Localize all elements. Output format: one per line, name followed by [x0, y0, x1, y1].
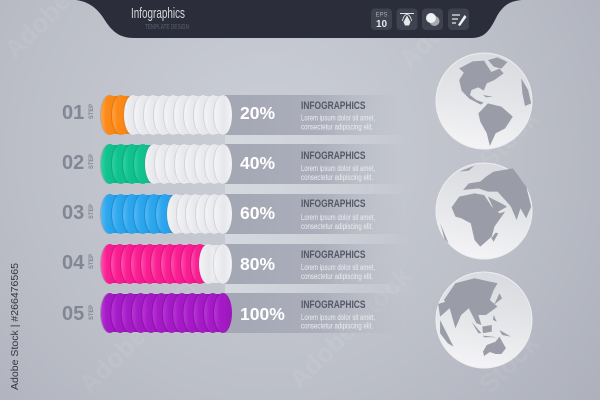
- header title: Infographics: [131, 5, 185, 22]
- light strips between rows: [225, 135, 420, 293]
- step label: STEP: [89, 104, 95, 119]
- text block: INFOGRAPHICS: [301, 198, 366, 210]
- watermark: Adobe Stock: [73, 265, 207, 399]
- icon: pen tool: [396, 8, 418, 30]
- step number: 05: [62, 303, 84, 325]
- header bar: [76, 0, 522, 38]
- disc cylinder 60%: [100, 194, 232, 234]
- percent: 40%: [240, 153, 275, 173]
- step label: STEP: [89, 254, 95, 269]
- watermark: Adobe Stock: [208, 110, 342, 244]
- text block: consectetur adipiscing elit.: [301, 173, 373, 182]
- step label: STEP: [89, 154, 95, 169]
- text block: [301, 150, 375, 182]
- band: [222, 95, 402, 135]
- disc cylinder 20%: [100, 95, 232, 135]
- text block: [301, 249, 375, 281]
- text block: Lorem ipsum dolor sit amet,: [301, 213, 375, 222]
- step number: 04: [62, 252, 85, 274]
- text block: consectetur adipiscing elit.: [301, 322, 373, 330]
- text block: consectetur adipiscing elit.: [301, 122, 373, 132]
- globe: Asia and Australia: [436, 272, 532, 368]
- text block: INFOGRAPHICS: [301, 150, 366, 162]
- step 05 row: [62, 293, 402, 333]
- icon: overlapping circles: [422, 8, 443, 30]
- text block: [301, 198, 375, 231]
- icon: EPS 10: [371, 8, 392, 30]
- band: [222, 293, 402, 333]
- watermark: Adobe Stock: [283, 260, 417, 394]
- text block: Lorem ipsum dolor sit amet,: [301, 114, 375, 122]
- band: [222, 144, 402, 184]
- header subtitle: TEMPLATE DESIGN: [145, 24, 189, 31]
- text block: INFOGRAPHICS: [301, 100, 366, 112]
- text block: [301, 100, 375, 132]
- band: [222, 194, 402, 234]
- percent: 60%: [240, 203, 275, 223]
- step number: 02: [62, 152, 84, 174]
- disc cylinder 100%: [100, 293, 232, 333]
- watermark: Stock: [473, 328, 545, 399]
- disc cylinder 80%: [100, 244, 232, 284]
- band: [222, 244, 402, 284]
- step number: 01: [62, 102, 84, 124]
- step label: STEP: [89, 305, 95, 320]
- icon: EPS 10: 10: [376, 19, 387, 30]
- text block: INFOGRAPHICS: [301, 249, 366, 261]
- text block: [301, 299, 375, 330]
- step 02 row: [62, 144, 402, 184]
- percent: 100%: [240, 304, 285, 324]
- globe: Americas: [436, 53, 532, 149]
- globe: Africa and Eurasia: [436, 163, 532, 259]
- text block: Lorem ipsum dolor sit amet,: [301, 263, 375, 272]
- watermark: Stock: [473, 103, 545, 174]
- step 04 row: [62, 244, 402, 284]
- vertical credit text: Adobe Stock | #266476565: [9, 263, 21, 390]
- text block: Lorem ipsum dolor sit amet,: [301, 164, 375, 173]
- step 03 row: [62, 194, 402, 234]
- icon: note and pencil: [448, 8, 469, 30]
- disc cylinder 40%: [100, 144, 232, 184]
- step label: STEP: [89, 204, 95, 219]
- step number: 03: [62, 202, 84, 224]
- percent: 20%: [240, 103, 275, 123]
- text block: Lorem ipsum dolor sit amet,: [301, 313, 375, 322]
- text block: INFOGRAPHICS: [301, 299, 366, 311]
- percent: 80%: [240, 254, 275, 274]
- step 01 row: [62, 95, 402, 135]
- text block: consectetur adipiscing elit.: [301, 222, 373, 231]
- icon: EPS 10: EPS: [375, 12, 388, 18]
- text block: consectetur adipiscing elit.: [301, 272, 373, 281]
